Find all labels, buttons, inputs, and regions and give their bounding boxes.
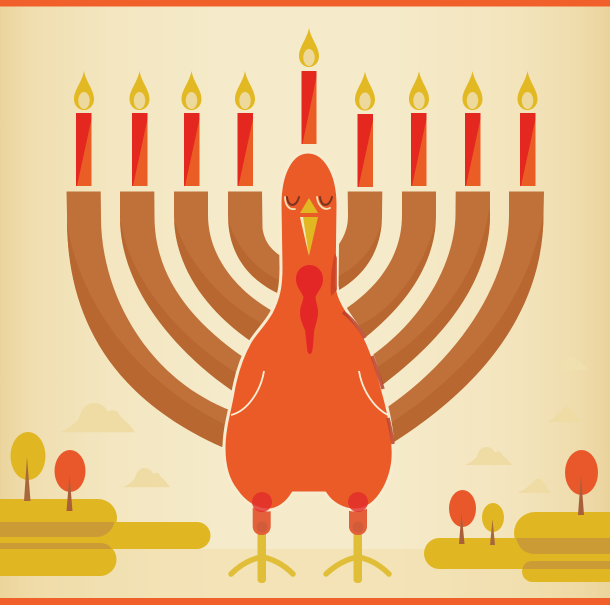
candles: [74, 28, 538, 187]
cloud left small: [123, 468, 170, 487]
left eye: [285, 197, 299, 209]
beak highlight: [300, 217, 309, 256]
tree yellow left: [10, 432, 46, 501]
candle 6: [409, 71, 429, 186]
arm left 1: [66, 192, 228, 447]
right leg: [326, 495, 389, 583]
shading right hip: [388, 418, 393, 444]
hill upper overlap: [0, 522, 114, 537]
tree red left: [54, 450, 86, 511]
left hills: [0, 499, 210, 576]
wing line left: [231, 371, 264, 415]
candle 5: [355, 72, 375, 187]
thigh left: [252, 492, 272, 512]
thigh right: [348, 492, 368, 512]
tree red big right: [565, 450, 598, 515]
beak upper: [300, 198, 318, 213]
cloud right middle: [465, 447, 512, 465]
top border: [0, 0, 610, 6]
cloud right low: [517, 479, 551, 493]
tree yellow right: [482, 503, 504, 545]
cloud right top: [553, 357, 589, 370]
candle 8: [518, 71, 538, 186]
hill upper overlap: [516, 538, 610, 554]
tree red small right: [449, 490, 476, 544]
arm right 1: [388, 192, 544, 442]
candle 3: [182, 71, 202, 186]
hill lower: [0, 543, 116, 576]
candle 7: [462, 71, 482, 186]
clouds: [60, 357, 589, 493]
body: [224, 152, 393, 510]
arm right 4: [338, 192, 382, 290]
shading right shoulder: [343, 312, 365, 338]
hill lower: [522, 561, 610, 582]
shading right side: [372, 356, 383, 389]
candle centre: [299, 28, 319, 144]
right hills: [424, 512, 610, 582]
hill back long: [0, 522, 210, 549]
candle 1: [74, 71, 94, 186]
hill lower overlap: [0, 543, 112, 549]
cloud left large: [60, 403, 135, 432]
arm left 3: [174, 192, 271, 340]
ground band: [0, 549, 610, 598]
arm left 2: [120, 192, 242, 390]
hill upper: [514, 512, 610, 554]
wing line right: [359, 371, 388, 415]
arm right 3: [347, 192, 436, 337]
right eye: [317, 197, 332, 209]
arm right 2: [374, 192, 490, 384]
wattle: [296, 265, 323, 354]
candle 2: [130, 71, 150, 186]
menorah arms: [66, 192, 544, 447]
beak lower: [300, 217, 318, 256]
candle 4: [235, 71, 255, 186]
neck shading: [331, 253, 337, 296]
cloud right upper: [547, 407, 583, 422]
trees: [10, 432, 598, 545]
arm left 4: [228, 192, 280, 293]
hill long: [424, 538, 610, 569]
left leg: [231, 495, 293, 583]
hill upper: [0, 499, 117, 537]
turkey: [224, 152, 393, 583]
hill lower overlap: [522, 561, 610, 569]
bottom border: [0, 598, 610, 605]
